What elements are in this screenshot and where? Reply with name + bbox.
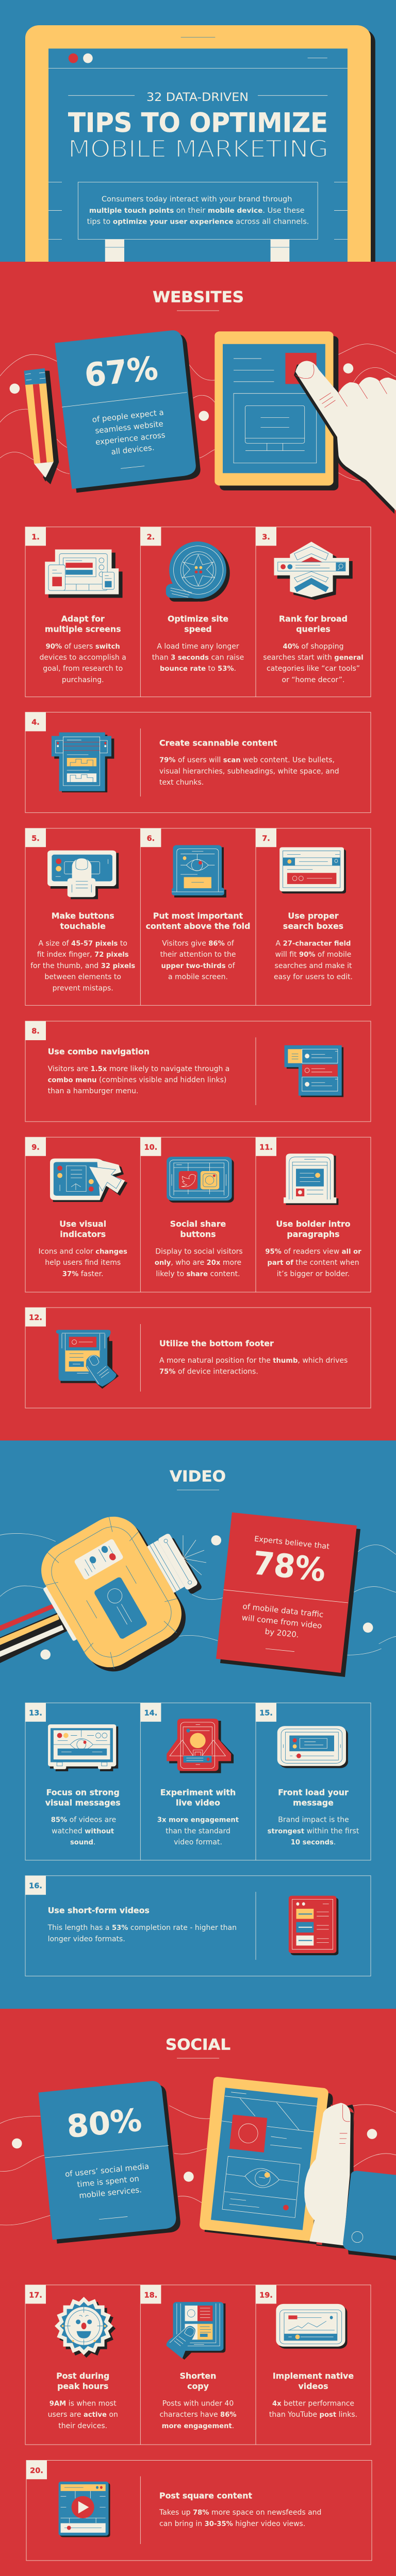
text: 90% of users switch bbox=[46, 642, 120, 651]
tip 19: 19. bbox=[259, 2292, 273, 2300]
video illustration: curves and dots bbox=[0, 1533, 396, 1659]
title: Social share bbox=[170, 1219, 226, 1229]
tip 5 bbox=[25, 828, 135, 992]
icon: bottom footer bbox=[56, 1330, 119, 1389]
tip 6: 6. bbox=[147, 835, 155, 843]
tip 5: 5. bbox=[31, 835, 40, 843]
title: live video bbox=[176, 1798, 220, 1807]
text: characters have 86% bbox=[159, 2411, 237, 2419]
section: social bbox=[0, 2009, 396, 2576]
title: Use proper bbox=[288, 911, 339, 921]
intro text: Consumers today interact with your brand through bbox=[102, 195, 292, 204]
text: Visitors give 86% of bbox=[162, 940, 234, 948]
text: part of the content when bbox=[267, 1259, 359, 1267]
tip 17: 17. bbox=[29, 2292, 42, 2300]
tablet and thumb illustration bbox=[200, 2077, 396, 2260]
icon: tire speed bbox=[166, 541, 230, 602]
text: their devices. bbox=[58, 2422, 107, 2430]
tip 7 bbox=[256, 828, 353, 981]
icon: multiple screens bbox=[45, 550, 123, 598]
tips 5-7 panel bbox=[25, 828, 371, 1005]
title: search boxes bbox=[283, 921, 343, 931]
intro text: multiple touch points on their mobile device. Use these bbox=[89, 207, 305, 215]
icon: visual message screen bbox=[48, 1724, 118, 1771]
tip 20 panel bbox=[26, 2461, 372, 2561]
stat card: 78%: by 2020. bbox=[265, 1626, 300, 1639]
tip 15 bbox=[256, 1703, 359, 1846]
title: message bbox=[293, 1798, 334, 1807]
tip 16 panel: 16. bbox=[29, 1882, 42, 1890]
stat card: 67%: of people expect a bbox=[92, 408, 164, 425]
text: than the standard bbox=[166, 1827, 230, 1835]
tip 9: 9. bbox=[31, 1144, 40, 1152]
tip 3 bbox=[256, 527, 364, 684]
websites illustration: curves and dots bbox=[0, 344, 396, 481]
tip 13 bbox=[25, 1703, 121, 1846]
title: indicators bbox=[60, 1229, 106, 1239]
tip 13: 13. bbox=[29, 1709, 42, 1718]
text: A size of 45-57 pixels to bbox=[38, 940, 127, 948]
icon: pencil bbox=[24, 368, 59, 484]
tip 8 panel bbox=[25, 1021, 371, 1122]
title bbox=[68, 91, 328, 163]
title: Make buttons bbox=[52, 911, 114, 921]
text: than YouTube post links. bbox=[269, 2411, 357, 2419]
text: 75% of device interactions. bbox=[159, 1368, 258, 1376]
text: bounce rate to 53%. bbox=[160, 665, 236, 673]
title: Optimize site bbox=[168, 614, 228, 623]
text: 3x more engagement bbox=[157, 1817, 239, 1824]
text: Brand impact is the bbox=[278, 1816, 349, 1824]
text: for the thumb, and 32 pixels bbox=[30, 962, 135, 970]
tip 10 bbox=[140, 1137, 243, 1278]
icon: square video bbox=[59, 2482, 110, 2537]
text: can bring in 30-35% higher video views. bbox=[159, 2520, 305, 2528]
text: their attention to the bbox=[160, 951, 236, 959]
text: strongest within the first bbox=[268, 1827, 359, 1835]
text: Icons and color changes bbox=[39, 1247, 127, 1256]
text: searches start with general bbox=[263, 654, 364, 662]
tip 1: 1. bbox=[31, 533, 40, 541]
icon: front load video player bbox=[277, 1726, 348, 1768]
tip 2: 2. bbox=[147, 533, 155, 541]
tip 12 panel: 12. bbox=[29, 1314, 42, 1322]
title: videos bbox=[298, 2381, 328, 2391]
title: content above the fold bbox=[146, 921, 250, 931]
stat card: 78%: Experts believe that bbox=[254, 1535, 330, 1551]
icon: touch button bbox=[47, 851, 119, 899]
text: likely to share content. bbox=[156, 1270, 240, 1278]
tip 15: 15. bbox=[259, 1709, 273, 1718]
heading: social: SOCIAL bbox=[166, 2036, 230, 2054]
stat card: 78%: of mobile data traffic bbox=[242, 1602, 324, 1619]
stat card: 67% bbox=[55, 330, 201, 493]
icon: live video phone bbox=[167, 1719, 234, 1773]
stat card: 80%: mobile services. bbox=[79, 2185, 142, 2200]
header tablet illustration bbox=[25, 25, 375, 282]
tip 14: 14. bbox=[144, 1709, 157, 1718]
text: 9AM is when most bbox=[50, 2399, 117, 2408]
tips 13-15 panel bbox=[25, 1703, 371, 1860]
stat card: 78% bbox=[216, 1513, 360, 1677]
tip 2 bbox=[140, 527, 244, 673]
text: sound. bbox=[70, 1838, 95, 1846]
stat card: 78%: will come from video bbox=[241, 1613, 322, 1631]
icon: sun face bbox=[55, 2297, 116, 2358]
text: visual hierarchies, subheadings, white space, and bbox=[159, 767, 339, 775]
title: visual messages bbox=[45, 1798, 121, 1807]
text: 4x better performance bbox=[272, 2399, 354, 2408]
tip 18 bbox=[140, 2285, 237, 2430]
text: will fit 90% of mobile bbox=[275, 951, 351, 959]
tip 12 panel bbox=[25, 1308, 371, 1408]
text: A 27-character field bbox=[276, 940, 351, 948]
title: speed bbox=[184, 624, 212, 634]
tip 19 bbox=[256, 2285, 357, 2419]
stat card: 67%: seamless website bbox=[95, 419, 163, 435]
icon: search chevrons bbox=[274, 541, 353, 600]
tip 4 panel bbox=[25, 712, 371, 812]
section: video bbox=[0, 1467, 396, 1976]
title: Utilize the bottom footer bbox=[159, 1338, 274, 1348]
stat card: 67%: experience across bbox=[95, 430, 166, 447]
text: a mobile screen. bbox=[168, 973, 228, 981]
text: A more natural position for the thumb, which drives bbox=[159, 1357, 348, 1365]
text: Posts with under 40 bbox=[162, 2399, 234, 2408]
tip 16 panel bbox=[25, 1876, 371, 1976]
title: paragraphs bbox=[287, 1229, 340, 1239]
text: goal, from research to bbox=[43, 665, 123, 673]
text: 85% of videos are bbox=[51, 1816, 116, 1824]
text: between elements to bbox=[44, 973, 121, 981]
tip 7: 7. bbox=[262, 835, 270, 843]
text: easy for users to edit. bbox=[274, 973, 353, 981]
stat card: 67%: 67% bbox=[83, 349, 160, 394]
icon: short video list bbox=[289, 1896, 338, 1955]
icon: bold intro paragraph bbox=[284, 1154, 338, 1205]
stat card: 80%: of users’ social media bbox=[64, 2162, 150, 2179]
tip 18: 18. bbox=[144, 2292, 157, 2300]
icon: search box bbox=[279, 847, 346, 893]
title: TIPS TO OPTIMIZE bbox=[68, 108, 328, 139]
text: purchasing. bbox=[62, 676, 104, 684]
title: peak hours bbox=[57, 2381, 108, 2391]
icon: eye on fold bbox=[172, 845, 226, 897]
text: This length has a 53% completion rate - higher than bbox=[48, 1924, 237, 1932]
tip 8 panel: 8. bbox=[31, 1027, 40, 1036]
tip 4 panel: 4. bbox=[31, 718, 40, 726]
intro text: tips to optimize your user experience across all channels. bbox=[87, 218, 309, 226]
icon: cursor indicator bbox=[50, 1159, 127, 1202]
text: categories like “car tools” bbox=[267, 665, 360, 673]
text: Takes up 78% more space on newsfeeds and bbox=[159, 2509, 321, 2517]
tips 17-19 panel bbox=[25, 2285, 371, 2445]
text: users are active on bbox=[48, 2411, 118, 2419]
text: A load time any longer bbox=[157, 642, 239, 651]
title: copy bbox=[187, 2381, 209, 2391]
title: Focus on strong bbox=[46, 1788, 120, 1797]
icon: finger on short copy bbox=[167, 2302, 225, 2360]
title: Put most important bbox=[153, 911, 243, 921]
tip 3: 3. bbox=[262, 533, 270, 541]
text: it’s bigger or bolder. bbox=[277, 1270, 350, 1278]
title: Rank for broad bbox=[279, 614, 348, 623]
stat card: 80% bbox=[38, 2081, 180, 2244]
text: or “home decor”. bbox=[282, 676, 344, 684]
tips 1-3 panel bbox=[25, 527, 371, 697]
tip 11 bbox=[256, 1137, 361, 1278]
stat card: 67%: all devices. bbox=[111, 443, 155, 456]
tablet and hand illustration bbox=[214, 331, 396, 514]
text: Visitors are 1.5x more likely to navigate through a bbox=[48, 1065, 229, 1073]
heading: video: VIDEO bbox=[170, 1467, 226, 1485]
text: upper two-thirds of bbox=[161, 962, 235, 970]
section: header bbox=[25, 25, 375, 262]
text: only, who are 20x more bbox=[155, 1259, 241, 1267]
tip 20 panel: 20. bbox=[30, 2467, 43, 2475]
title: Experiment with bbox=[160, 1788, 236, 1797]
illustration: video camera bbox=[0, 1493, 218, 1685]
title: Shorten bbox=[180, 2371, 216, 2381]
title: Use bolder intro bbox=[276, 1219, 351, 1229]
tip 10: 10. bbox=[144, 1144, 157, 1152]
social illustration: curves and dots bbox=[0, 2105, 396, 2225]
tip 6 bbox=[140, 828, 250, 981]
title: Implement native bbox=[273, 2371, 354, 2381]
title: Post during bbox=[56, 2371, 109, 2381]
heading: websites: WEBSITES bbox=[153, 289, 244, 306]
title: Post square content bbox=[159, 2490, 252, 2500]
tip 11: 11. bbox=[259, 1144, 273, 1152]
text: help users find items bbox=[45, 1259, 121, 1267]
text: than a hamburger menu. bbox=[48, 1087, 138, 1095]
stat card: 78%: 78% bbox=[251, 1544, 327, 1589]
title: 32 DATA-DRIVEN bbox=[146, 91, 249, 104]
text: 79% of users will scan web content. Use bullets, bbox=[159, 756, 335, 765]
text: 95% of readers view all or bbox=[265, 1247, 361, 1256]
title: multiple screens bbox=[45, 624, 121, 634]
text: watched without bbox=[52, 1827, 114, 1835]
tip 14 bbox=[140, 1703, 239, 1846]
text: fit index finger, 72 pixels bbox=[37, 951, 129, 959]
tips 9-11 panel bbox=[25, 1137, 371, 1292]
title: Create scannable content bbox=[159, 738, 277, 748]
text: longer video formats. bbox=[48, 1935, 125, 1943]
text: video format. bbox=[174, 1838, 222, 1846]
text: 10 seconds. bbox=[291, 1838, 336, 1846]
tip 17 bbox=[25, 2285, 118, 2430]
title: Front load your bbox=[278, 1788, 349, 1797]
title: queries bbox=[296, 624, 331, 634]
text: 40% of shopping bbox=[283, 642, 344, 651]
text: devices to accomplish a bbox=[40, 654, 126, 662]
icon: scannable document bbox=[52, 733, 114, 792]
text: searches and make it bbox=[275, 962, 352, 970]
text: text chunks. bbox=[159, 778, 204, 787]
text: than 3 seconds can raise bbox=[152, 654, 244, 662]
title: MOBILE MARKETING bbox=[68, 135, 328, 163]
text: 37% faster. bbox=[62, 1270, 104, 1278]
text: prevent mistaps. bbox=[53, 984, 113, 992]
title: touchable bbox=[60, 921, 106, 931]
tip 1 bbox=[25, 527, 126, 684]
text: combo menu (combines visible and hidden links) bbox=[48, 1076, 226, 1084]
title: Adapt for bbox=[61, 614, 105, 623]
title: buttons bbox=[180, 1229, 216, 1239]
tip 9 bbox=[25, 1137, 127, 1278]
stat card: 80%: time is spent on bbox=[77, 2174, 140, 2189]
stat card: 80%: 80% bbox=[65, 2102, 143, 2145]
icon: combo navigation menu bbox=[285, 1045, 343, 1097]
icon: native video player bbox=[276, 2304, 347, 2349]
title: Use short-form videos bbox=[48, 1905, 150, 1915]
title: Use visual bbox=[59, 1219, 106, 1229]
section: websites bbox=[0, 262, 396, 1440]
text: Display to social visitors bbox=[155, 1247, 243, 1256]
text: more engagement. bbox=[162, 2422, 234, 2430]
icon: social share buttons bbox=[167, 1157, 234, 1202]
title: Use combo navigation bbox=[48, 1047, 150, 1056]
